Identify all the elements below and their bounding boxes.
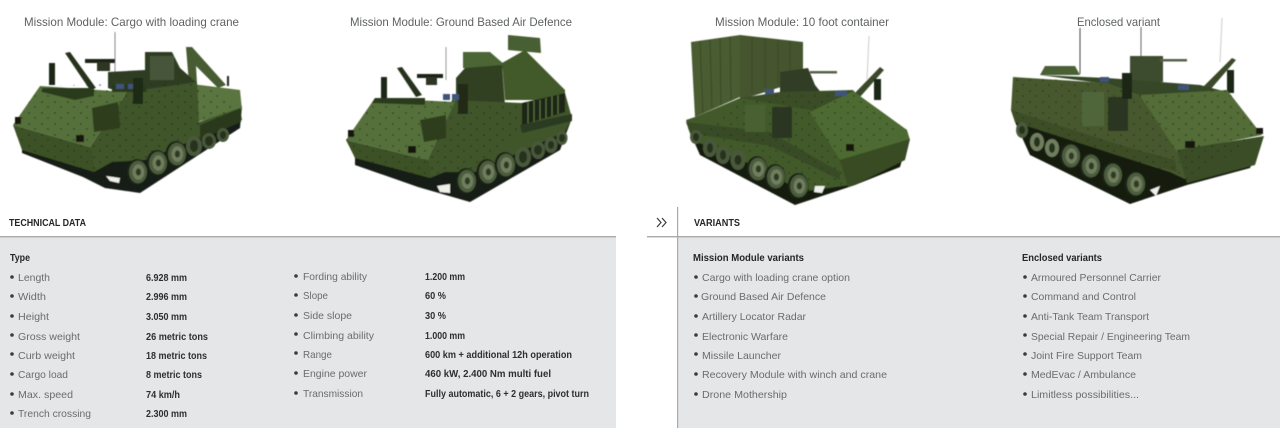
list: mission module variants: Mission Module variants bbox=[693, 253, 804, 264]
vehicle: 10 foot container bbox=[686, 35, 910, 205]
spec list: mobility and power: 60 % bbox=[425, 291, 446, 302]
vehicle: ground based air defence bbox=[346, 35, 572, 202]
spec list: dimensions and weights: 74 km/h bbox=[146, 390, 180, 401]
spec list: dimensions and weights: Cargo load bbox=[18, 369, 68, 381]
heading: air defence module title: Mission Module: Ground Based Air Defence bbox=[350, 15, 572, 29]
spec list: mobility and power: Side slope bbox=[303, 310, 352, 322]
vehicle: enclosed variant bbox=[1011, 18, 1264, 204]
list: mission module variants: Drone Mothership bbox=[702, 389, 787, 401]
spec list: mobility and power: Slope bbox=[303, 290, 328, 302]
spec list: mobility and power: Transmission bbox=[303, 388, 363, 400]
list: mission module variants: Ground Based Air Defence bbox=[701, 291, 826, 303]
heading: variants: VARIANTS bbox=[694, 218, 740, 229]
list: mission module variants: Electronic Warfare bbox=[702, 331, 788, 343]
list: enclosed variants: Special Repair / Engineering Team bbox=[1031, 331, 1190, 343]
list: enclosed variants: Command and Control bbox=[1031, 291, 1136, 303]
list: enclosed variants: Limitless possibilities... bbox=[1031, 389, 1139, 401]
spec list: dimensions and weights: Width bbox=[18, 291, 46, 303]
list: mission module variants bbox=[693, 253, 887, 401]
spec list: mobility and power: 30 % bbox=[425, 311, 446, 322]
spec list: mobility and power: Climbing ability bbox=[303, 330, 375, 342]
list: enclosed variants: Joint Fire Support Team bbox=[1031, 350, 1142, 362]
list: enclosed variants bbox=[1022, 253, 1190, 401]
spec list: mobility and power: Range bbox=[303, 349, 332, 361]
spec list: dimensions and weights: Max. speed bbox=[18, 389, 73, 401]
heading: technical data: TECHNICAL DATA bbox=[9, 218, 86, 229]
icon: double chevron bbox=[657, 218, 666, 227]
list: mission module variants: Cargo with loading crane option bbox=[702, 272, 850, 284]
spec list: dimensions and weights: 3.050 mm bbox=[146, 312, 187, 323]
spec list: dimensions and weights: 18 metric tons bbox=[146, 351, 207, 362]
spec list: mobility and power: Fully automatic, 6 + 2 gears, pivot turn bbox=[425, 389, 589, 400]
spec list: mobility and power: Engine power bbox=[303, 368, 367, 380]
list: enclosed variants: Armoured Personnel Carrier bbox=[1031, 272, 1161, 284]
spec list: mobility and power: 1.200 mm bbox=[425, 272, 465, 283]
heading: container module title: Mission Module: 10 foot container bbox=[715, 15, 889, 29]
spec list: dimensions and weights bbox=[10, 272, 208, 420]
subheading: type: Type bbox=[10, 253, 30, 264]
list: enclosed variants: Anti-Tank Team Transport bbox=[1031, 311, 1149, 323]
spec list: dimensions and weights: 2.300 mm bbox=[146, 409, 187, 420]
spec list: mobility and power: Fording ability bbox=[303, 271, 368, 283]
spec list: dimensions and weights: Curb weight bbox=[18, 350, 75, 362]
spec list: mobility and power: 460 kW, 2.400 Nm multi fuel bbox=[425, 369, 551, 380]
heading: enclosed variant title: Enclosed variant bbox=[1077, 15, 1161, 29]
panel: technical data bbox=[0, 218, 616, 428]
list: mission module variants: Recovery Module with winch and crane bbox=[702, 369, 887, 381]
spec list: dimensions and weights: 2.996 mm bbox=[146, 292, 187, 303]
spec list: dimensions and weights: Gross weight bbox=[18, 331, 80, 343]
spec list: mobility and power: 600 km + additional 12h operation bbox=[425, 350, 572, 361]
spec list: dimensions and weights: Trench crossing bbox=[18, 408, 91, 420]
panel: variants bbox=[647, 207, 1280, 428]
list: enclosed variants: Enclosed variants bbox=[1022, 253, 1102, 264]
heading: cargo module title: Mission Module: Cargo with loading crane bbox=[24, 15, 239, 29]
spec list: dimensions and weights: 6.928 mm bbox=[146, 273, 187, 284]
list: mission module variants: Missile Launcher bbox=[702, 350, 781, 362]
vehicle: cargo with loading crane bbox=[13, 32, 242, 193]
spec list: dimensions and weights: Length bbox=[18, 272, 50, 284]
spec list: dimensions and weights: 8 metric tons bbox=[146, 370, 202, 381]
spec list: mobility and power: 1.000 mm bbox=[425, 331, 465, 342]
spec list: dimensions and weights: Height bbox=[18, 311, 49, 323]
spec list: dimensions and weights: 26 metric tons bbox=[146, 332, 208, 343]
list: mission module variants: Artillery Locator Radar bbox=[702, 311, 806, 323]
list: enclosed variants: MedEvac / Ambulance bbox=[1031, 369, 1136, 381]
spec list: mobility and power bbox=[294, 271, 589, 400]
